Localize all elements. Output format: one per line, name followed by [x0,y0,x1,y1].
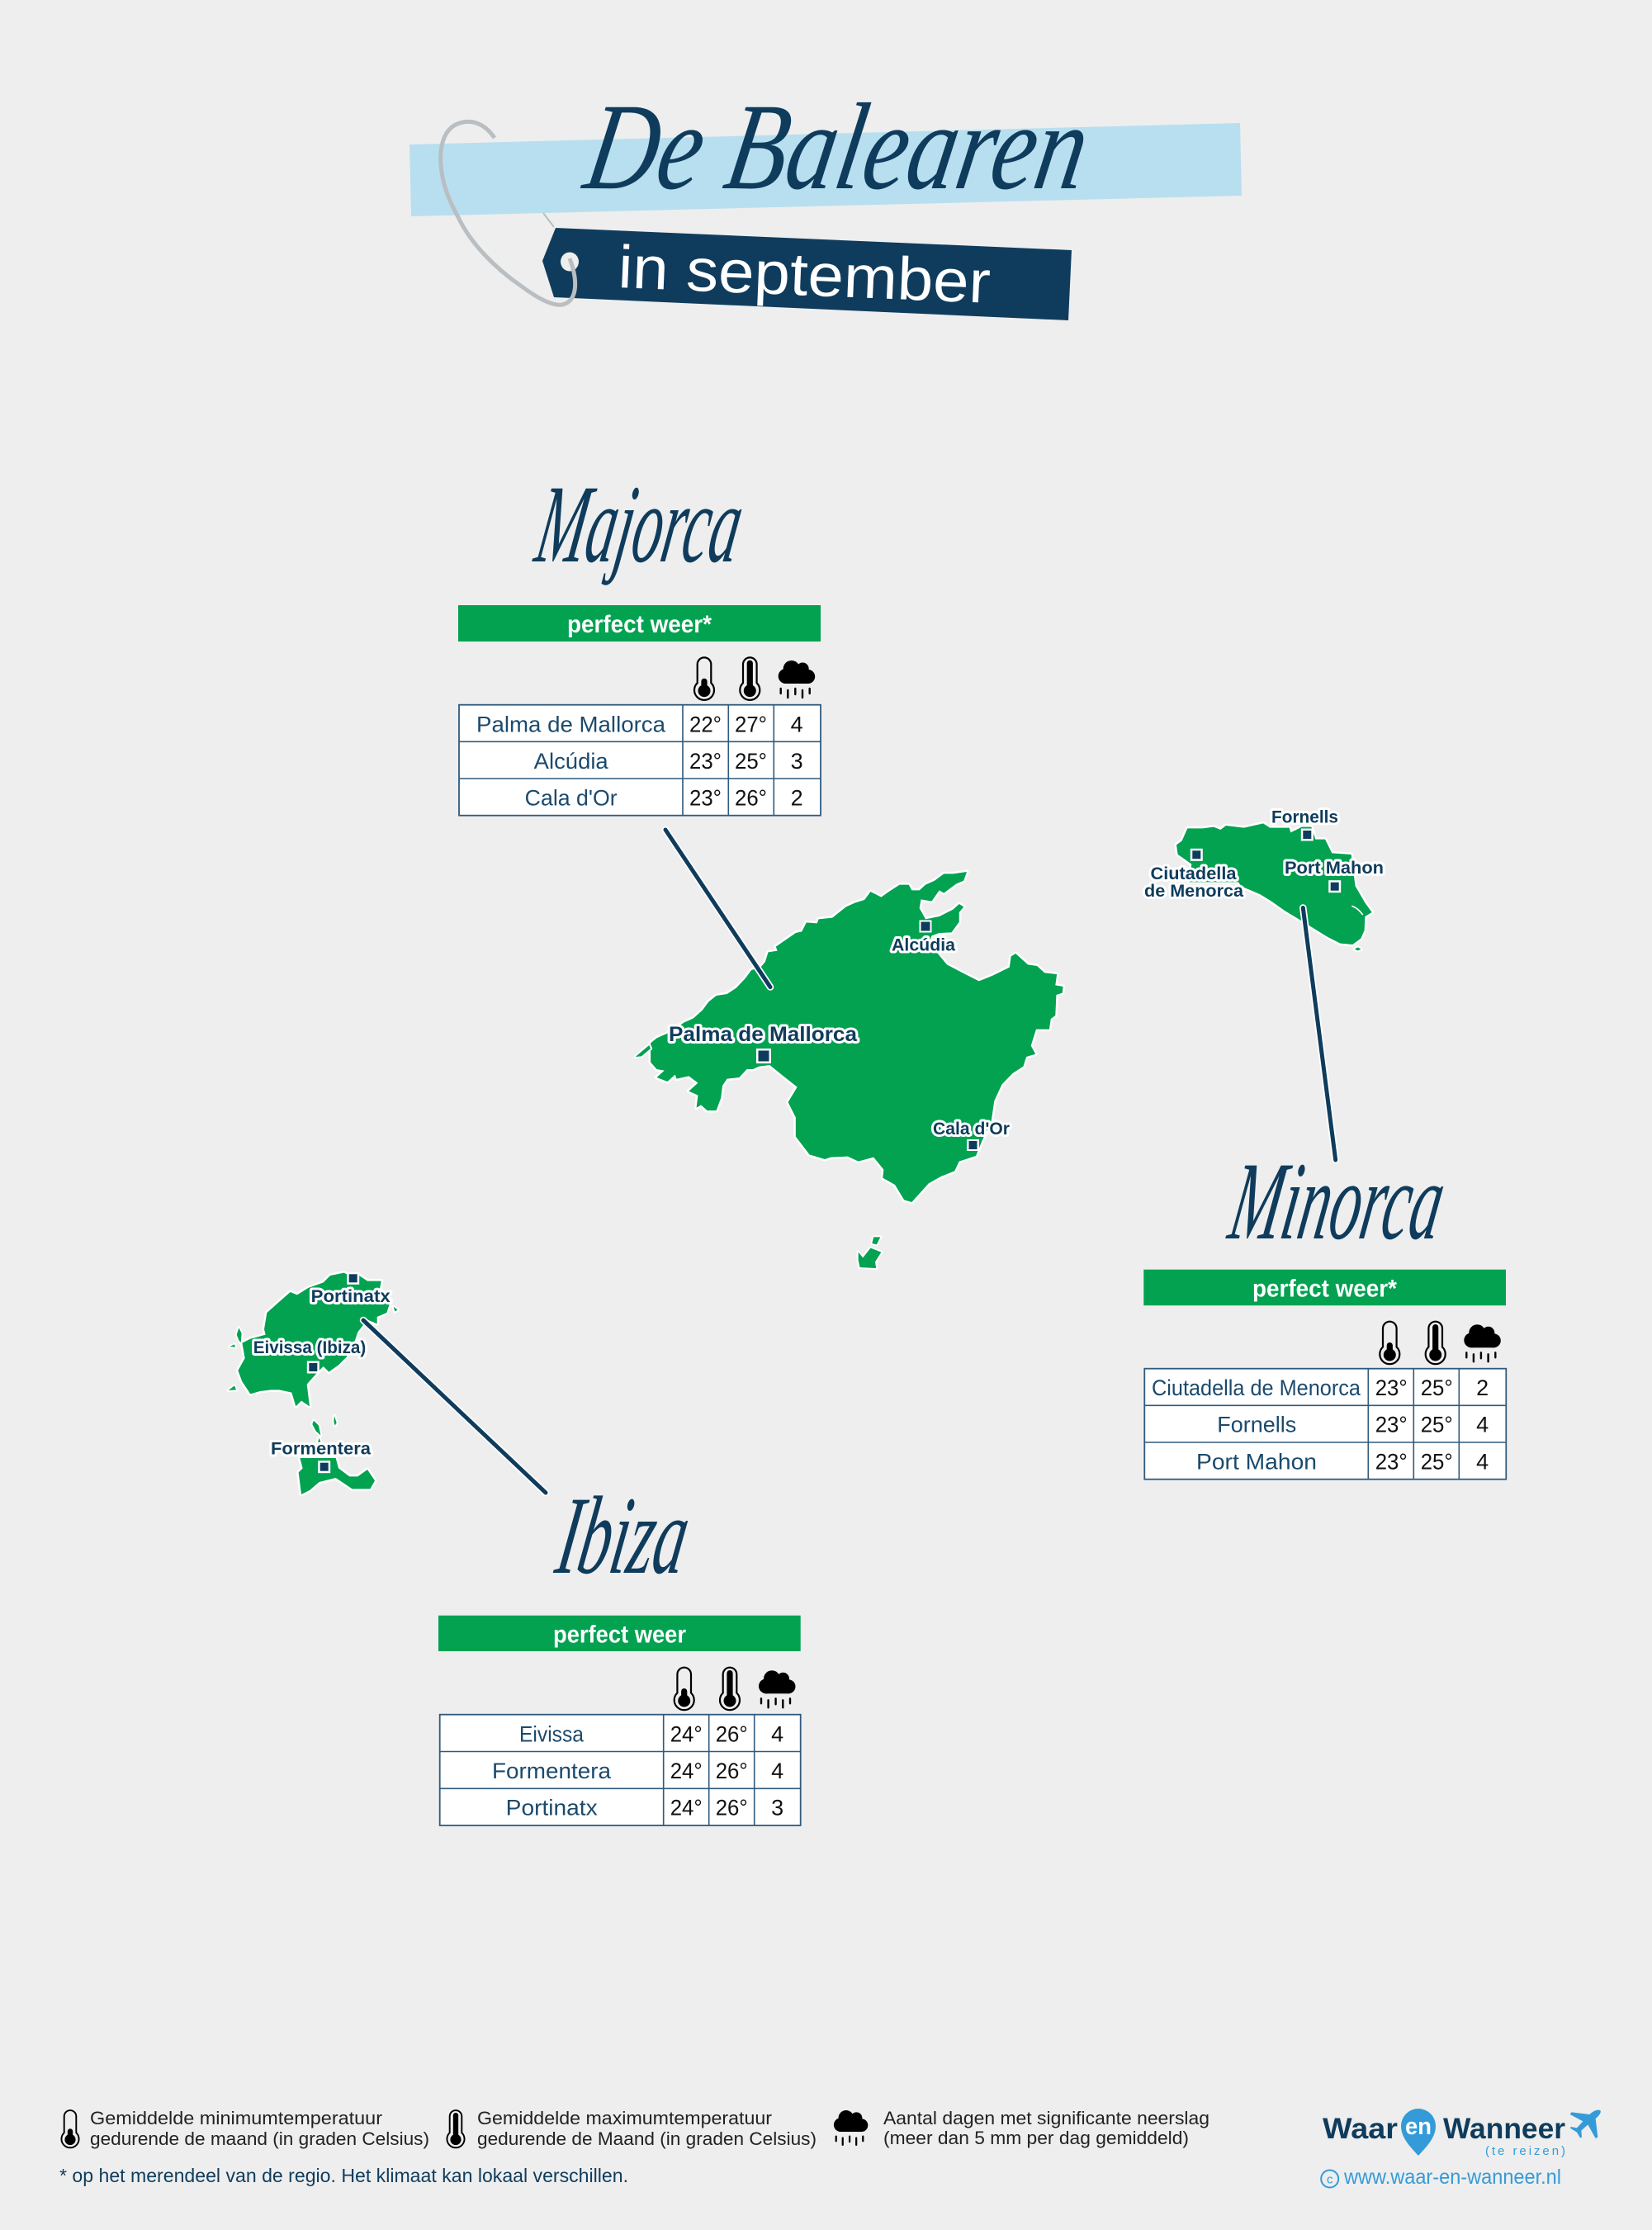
weather table: 4 [771,1759,783,1783]
marker Port Mahon [1328,880,1341,892]
label Eivissa: Eivissa (Ibiza) [253,1338,366,1357]
weather table: Alcúdia [534,749,608,774]
map: Minorca [1144,808,1384,1160]
weather table: 25° [735,749,767,774]
marker Palma [756,1049,771,1063]
weather table: 25° [1421,1413,1453,1437]
weather table: Cala d'Or [525,786,618,811]
icon: min thermometer [694,657,714,700]
label Ciutadella de Menorca: Ciutadella [1151,864,1237,883]
marker Eivissa [307,1361,320,1374]
label Cala d'Or: Cala d'Or [933,1120,1010,1139]
copyright mark: c [1327,2173,1333,2186]
legend text: max temperature: Gemiddelde maximumtemperatuur [477,2108,773,2128]
status band: perfect weer* [567,611,712,638]
weather table [1144,1369,1506,1480]
label Portinatx: Portinatx [311,1287,391,1306]
weather table: 26° [735,786,767,811]
weather table [440,1715,801,1825]
legend icon: min thermometer [61,2110,79,2147]
weather table [459,705,821,816]
label Alcúdia: Alcúdia [892,936,955,954]
weather table: 25° [1421,1449,1453,1474]
logo pin text: en [1405,2114,1432,2140]
weather table: 4 [1476,1449,1489,1474]
logo [1321,2109,1601,2189]
marker Ciutadella [1190,849,1203,861]
label Fornells: Fornells [1271,808,1338,827]
legend text: min temperature [90,2108,429,2149]
weather table: 25° [1421,1375,1453,1400]
weather table: 23° [1375,1375,1408,1400]
weather table: 23° [689,749,722,774]
legend text: max temperature [477,2108,817,2149]
weather table: 4 [1476,1413,1489,1437]
connector line Ibiza [363,1320,546,1493]
legend text: rain: Aantal dagen met significante neerslag [883,2108,1209,2128]
weather table: Ciutadella de Menorca [1152,1375,1361,1400]
heading Minorca: Minorca [1221,1140,1454,1263]
status band [438,1616,801,1651]
weather table: 24° [670,1721,703,1746]
icon: max thermometer [720,1668,740,1710]
logo wordmark Waar: Waar [1323,2113,1398,2145]
label Port Mahon: Port Mahon [1285,859,1384,878]
map: Majorca [636,830,1063,1268]
website: www.waar-en-wanneer.nl [1343,2166,1561,2189]
label Ciutadella de Menorca [1144,864,1243,901]
weather table: Eivissa [519,1721,584,1746]
panel: Majorca [458,463,821,816]
weather table: 4 [791,713,803,737]
status band [458,605,821,642]
weather table: 4 [771,1721,783,1746]
label Palma de Mallorca: Palma de Mallorca [669,1023,858,1046]
weather table: 23° [1375,1449,1408,1474]
weather table: 2 [791,786,803,811]
tag string short [543,213,554,227]
icon: rain cloud [1464,1324,1501,1361]
marker Alcúdia [920,920,931,933]
legend icon: max thermometer [447,2110,465,2147]
map: Ibiza and Formentera [229,1272,546,1494]
title block [409,78,1242,320]
icon: plane [1570,2110,1601,2138]
island shapes Ibiza [229,1273,398,1494]
legend [61,2108,1209,2149]
icon: max thermometer [1426,1322,1446,1364]
weather table: 24° [670,1796,703,1820]
marker Fornells [1301,829,1314,840]
weather table: Formentera [492,1759,611,1783]
weather table: 22° [689,713,722,737]
weather table: 3 [771,1796,783,1820]
title text: De Balearen [575,78,1100,215]
legend text: rain [883,2108,1209,2148]
weather table: 2 [1476,1375,1489,1400]
weather table: 26° [716,1796,748,1820]
island shape Minorca [1176,823,1372,950]
logo pin [1401,2109,1436,2156]
price tag [542,228,1072,320]
label Formentera: Formentera [271,1440,371,1459]
legend text: min temperature: Gemiddelde minimumtemperatuur [90,2108,383,2128]
subtitle: in september [617,234,992,316]
heading Majorca: Majorca [528,463,752,586]
marker Formentera [318,1461,330,1473]
icon: min thermometer [675,1668,694,1710]
weather table: 23° [1375,1413,1408,1437]
icon: rain cloud [779,660,815,698]
weather table: 23° [689,786,722,811]
connector line Majorca [665,830,770,987]
legend text: max temperature: gedurende de Maand (in graden Celsius) [477,2128,817,2149]
logo tagline: (te reizen) [1485,2144,1565,2158]
weather table: 27° [735,713,767,737]
weather table: 24° [670,1759,703,1783]
icon: rain cloud [759,1670,796,1707]
island shape Majorca [636,872,1063,1268]
weather table: 26° [716,1759,748,1783]
marker Portinatx [347,1272,359,1285]
status band: perfect weer* [1252,1275,1397,1303]
marker Cala d'Or [967,1139,979,1151]
panel: Minorca [1143,1140,1506,1480]
weather table: Fornells [1217,1413,1296,1437]
heading Ibiza: Ibiza [548,1475,698,1598]
weather table: 26° [716,1721,748,1746]
footnote: * op het merendeel van de regio. Het klimaat kan lokaal verschillen. [59,2165,628,2186]
title band [409,123,1242,216]
legend text: min temperature: gedurende de maand (in graden Celsius) [90,2128,429,2149]
tag hole [561,253,579,271]
tag string loop [441,121,575,305]
legend icon: rain cloud [834,2110,868,2145]
weather table: Port Mahon [1196,1449,1317,1474]
label Ciutadella de Menorca: de Menorca [1144,882,1243,901]
status band [1143,1270,1506,1305]
weather table: 3 [791,749,803,774]
weather table: Portinatx [506,1796,598,1820]
connector line Minorca [1303,908,1336,1160]
weather table: Palma de Mallorca [476,713,665,737]
legend text: rain: (meer dan 5 mm per dag gemiddeld) [883,2128,1189,2148]
icon: max thermometer [740,657,760,700]
copyright mark [1321,2170,1338,2188]
panel: Ibiza [438,1475,801,1825]
icon: min thermometer [1380,1322,1399,1364]
logo wordmark Wanneer: Wanneer [1443,2113,1565,2145]
status band: perfect weer [553,1622,686,1648]
